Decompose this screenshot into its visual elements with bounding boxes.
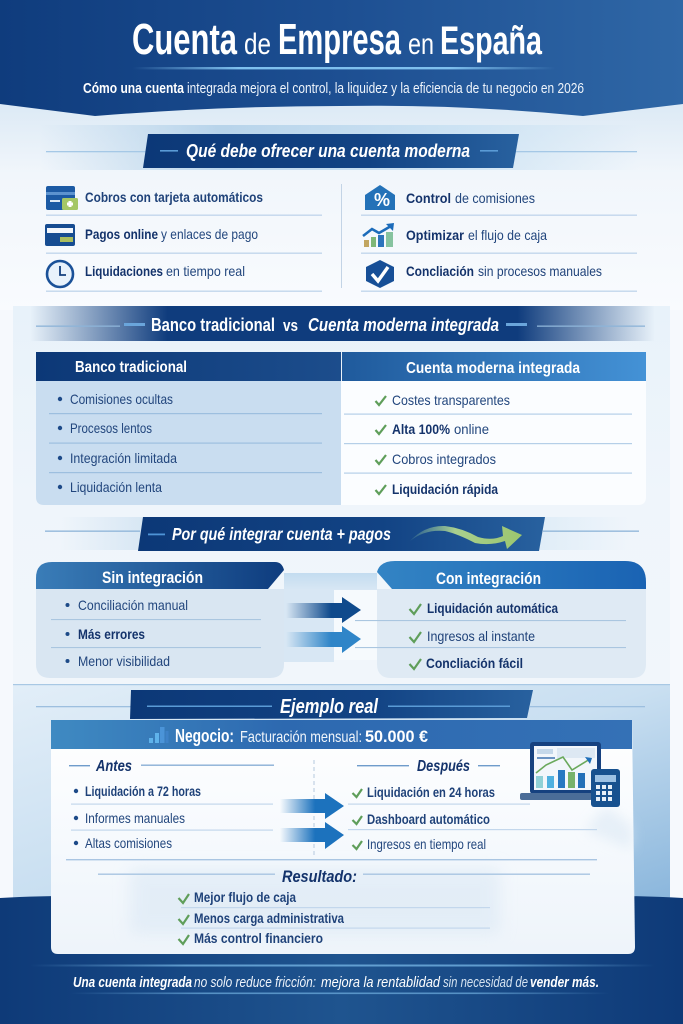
feature: cobros con tarjeta bbox=[46, 186, 322, 216]
footer message: sin necesidad de bbox=[443, 975, 528, 991]
comparison table bbox=[36, 352, 646, 505]
feature: flujo de caja: Optimizar bbox=[406, 227, 464, 243]
section heading bar bbox=[143, 134, 519, 168]
antes column bbox=[69, 758, 274, 851]
antes column: Informes manuales bbox=[85, 810, 185, 826]
column: cuenta moderna: Costes transparentes bbox=[392, 392, 510, 408]
feature: control de comisiones bbox=[361, 185, 637, 216]
column: banco tradicional: Liquidación lenta bbox=[70, 479, 162, 495]
column: cuenta moderna bbox=[341, 352, 646, 505]
feature: conciliación bbox=[361, 260, 637, 292]
title: España bbox=[440, 19, 543, 63]
panel: con integración: Liquidación automática bbox=[427, 600, 558, 616]
panel: con integración: Ingresos al instante bbox=[427, 628, 535, 644]
upper background panel bbox=[13, 306, 670, 685]
feature: conciliación: sin procesos manuales bbox=[478, 263, 602, 279]
resultado: Resultado: bbox=[282, 867, 357, 886]
section heading: por qué integrar bbox=[45, 517, 639, 551]
page background bbox=[0, 100, 683, 310]
arrow: dark flow arrow bbox=[286, 597, 361, 623]
lower background panel bbox=[13, 685, 670, 901]
column: banco tradicional: Procesos lentos bbox=[70, 420, 152, 436]
feature: conciliación: Concliación bbox=[406, 263, 474, 279]
después column bbox=[348, 758, 597, 852]
footer message: mejora la rentablidad bbox=[321, 975, 441, 991]
negocio header: Facturación mensual: bbox=[240, 729, 362, 746]
section heading: comparison bbox=[30, 306, 655, 341]
después column: Dashboard automático bbox=[367, 811, 490, 827]
arrow: antes to después bbox=[280, 793, 344, 819]
section heading: por qué integrar: Por qué integrar cuenta + pagos bbox=[172, 524, 391, 544]
flow connector background bbox=[284, 573, 377, 662]
column: cuenta moderna: Cuenta moderna integrada bbox=[406, 360, 580, 377]
resultado: Mejor flujo de caja bbox=[194, 889, 296, 905]
card: example bbox=[51, 720, 635, 954]
resultado: Menos carga administrativa bbox=[194, 910, 344, 926]
footer message: Una cuenta integrada bbox=[73, 975, 192, 991]
section: qué debe ofrecer bbox=[40, 125, 640, 292]
section heading: comparison: Cuenta moderna integrada bbox=[308, 315, 499, 335]
resultado: Más control financiero bbox=[194, 930, 323, 946]
resultado bbox=[98, 867, 590, 946]
footer background bbox=[0, 896, 683, 1024]
panel: sin integración: Más errores bbox=[78, 626, 145, 642]
feature: pagos online: Pagos online bbox=[85, 226, 158, 242]
feature: cobros con tarjeta: Cobros con tarjeta automáticos bbox=[85, 189, 263, 205]
arrow: antes to después 2 bbox=[280, 822, 344, 849]
panel: con integración bbox=[355, 561, 646, 678]
panel: sin integración: Conciliación manual bbox=[78, 597, 188, 613]
feature: control de comisiones: de comisiones bbox=[455, 190, 535, 206]
header banner bbox=[0, 0, 683, 116]
después column: Después bbox=[417, 758, 470, 775]
icon: green swoosh arrow bbox=[410, 526, 522, 549]
footer message bbox=[30, 964, 655, 994]
feature: control de comisiones: % bbox=[374, 190, 390, 210]
section heading: comparison: vs bbox=[283, 316, 298, 335]
column: banco tradicional: Integración limitada bbox=[70, 450, 177, 466]
panel: sin integración bbox=[36, 562, 284, 678]
feature: flujo de caja: el flujo de caja bbox=[468, 227, 547, 243]
panel: sin integración: Menor visibilidad bbox=[78, 653, 170, 669]
subtitle bbox=[83, 81, 584, 97]
subtitle: integrada mejora el control, la liquidez y la eficiencia de tu negocio en 2026 bbox=[187, 81, 584, 97]
section heading bar: Qué debe ofrecer una cuenta moderna bbox=[186, 140, 470, 161]
panel: sin integración: Sin integración bbox=[102, 568, 203, 587]
negocio header: Negocio: bbox=[175, 726, 234, 746]
section heading: ejemplo real bbox=[36, 690, 645, 719]
antes column: Altas comisiones bbox=[85, 835, 172, 851]
column: cuenta moderna: Liquidación rápida bbox=[392, 481, 498, 497]
column: cuenta moderna: online bbox=[454, 421, 489, 437]
subtitle: Cómo una cuenta bbox=[83, 81, 185, 97]
feature: liquidaciones bbox=[46, 261, 322, 292]
arrow: light flow arrow bbox=[286, 626, 361, 653]
panel: con integración: Con integración bbox=[436, 569, 541, 588]
feature: pagos online: y enlaces de pago bbox=[161, 226, 258, 242]
negocio header bbox=[51, 720, 632, 749]
title: de bbox=[244, 28, 271, 61]
negocio header: 50.000 € bbox=[365, 727, 429, 746]
footer message: vender más. bbox=[530, 975, 599, 991]
blurred highlights bbox=[130, 806, 632, 934]
feature: flujo de caja bbox=[361, 223, 637, 254]
feature: pagos online bbox=[45, 224, 322, 254]
title underline bbox=[133, 67, 555, 69]
antes column: Liquidación a 72 horas bbox=[85, 783, 201, 799]
column: cuenta moderna: Alta 100% bbox=[392, 421, 450, 437]
después column: Liquidación en 24 horas bbox=[367, 784, 495, 800]
title: Cuenta bbox=[132, 15, 237, 64]
después column: Ingresos en tiempo real bbox=[367, 836, 486, 852]
feature: control de comisiones: Control bbox=[406, 190, 451, 206]
column: cuenta moderna: Cobros integrados bbox=[392, 451, 496, 467]
section heading: ejemplo real: Ejemplo real bbox=[280, 696, 378, 718]
column: banco tradicional: Comisiones ocultas bbox=[70, 391, 173, 407]
icon: laptop and calculator bbox=[520, 742, 620, 807]
column: banco tradicional: Banco tradicional bbox=[75, 359, 187, 376]
column: banco tradicional bbox=[36, 352, 341, 505]
section heading: comparison: Banco tradicional bbox=[151, 315, 275, 335]
title: Empresa bbox=[278, 15, 401, 64]
title: en bbox=[408, 28, 434, 61]
feature: liquidaciones: Liquidaciones bbox=[85, 263, 163, 279]
footer message: no solo reduce fricción: bbox=[194, 975, 316, 991]
antes column: Antes bbox=[95, 758, 132, 775]
title bbox=[132, 15, 543, 64]
panel: con integración: Concliación fácil bbox=[426, 655, 523, 671]
feature: liquidaciones: en tiempo real bbox=[166, 263, 245, 279]
